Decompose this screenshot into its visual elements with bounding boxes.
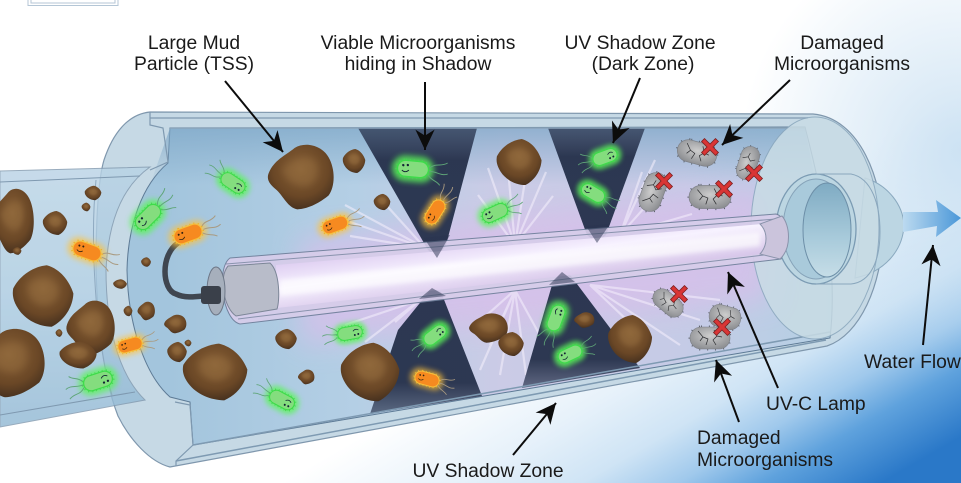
rock [137, 302, 155, 320]
label: UV Shadow Zone (Dark Zone): UV Shadow Zone [564, 33, 716, 54]
label: Water Flow [864, 245, 961, 373]
rock [498, 332, 524, 356]
rock [85, 186, 101, 200]
outlet ring [776, 174, 856, 284]
red cross [718, 184, 730, 194]
flange left [150, 112, 193, 466]
red cross [748, 168, 760, 178]
label: Damaged Microorganisms bottom [697, 360, 833, 471]
rock [469, 313, 508, 343]
arrow [923, 245, 933, 345]
bacterium [165, 212, 224, 252]
bacterium [573, 176, 622, 217]
label: Damaged Microorganisms bottom: Microorganisms [697, 450, 833, 471]
bacterium [320, 319, 368, 348]
label: UV-C Lamp [728, 272, 866, 415]
rock [298, 370, 314, 384]
damaged cell [675, 137, 719, 169]
end plate [751, 117, 879, 339]
rock [374, 194, 390, 210]
water flow arrow [903, 200, 961, 237]
damaged cell [690, 327, 730, 349]
bacterium [417, 181, 460, 233]
rock [13, 265, 73, 327]
bacterium [62, 362, 121, 403]
rock [82, 203, 90, 211]
rock [59, 342, 97, 368]
tube interior [127, 127, 832, 445]
rock [497, 139, 542, 185]
shadow wedge: bottom 1 [370, 288, 482, 414]
outer reactor tube [96, 112, 883, 467]
nozzle dome [855, 178, 904, 278]
bacterium [474, 190, 527, 231]
cropped frame fragment [28, 0, 118, 6]
quartz sleeve [222, 214, 787, 324]
red cross [704, 142, 716, 152]
green microorganisms [62, 141, 624, 418]
rock [268, 145, 334, 209]
rock [56, 329, 62, 337]
label: Viable Microorganisms: hiding in Shadow [345, 54, 491, 75]
label: Damaged Microorganisms bottom: Damaged [697, 428, 781, 449]
tube bottom rim [176, 332, 830, 461]
damaged cell [734, 144, 762, 182]
label: Damaged Microorganisms top: Microorganisms [774, 54, 910, 75]
lamp cable and connector [165, 243, 221, 304]
rock [341, 343, 399, 401]
damaged microorganisms [636, 137, 762, 349]
rock [141, 257, 151, 267]
tube top rim [150, 118, 808, 128]
label: Water Flow: Water Flow [864, 352, 961, 373]
purple glow around lamp [300, 185, 770, 345]
rock [0, 189, 34, 253]
arrow [613, 78, 640, 143]
rock [275, 329, 297, 349]
bacterium [550, 333, 600, 371]
label: UV Shadow Zone bottom: UV Shadow Zone [412, 461, 564, 482]
shadow zones [358, 128, 645, 414]
rock [113, 279, 127, 289]
red cross [674, 288, 684, 300]
shadow wedge: bottom 2 [522, 272, 640, 388]
orange microorganisms [64, 181, 460, 396]
rock [185, 340, 191, 346]
label: Large Mud Particle [134, 33, 283, 152]
rock [0, 329, 45, 397]
bacterium [202, 156, 254, 202]
bacterium [406, 316, 455, 360]
rock [13, 247, 21, 255]
lamp glow body [276, 224, 769, 308]
bacterium [535, 297, 572, 350]
label: Large Mud Particle: Large Mud [148, 33, 240, 54]
outlet end plate and nozzle [751, 117, 904, 339]
bacterium [408, 366, 457, 396]
rock [574, 312, 594, 328]
bacterium [111, 328, 161, 359]
rock [124, 306, 132, 316]
damaged cell [707, 302, 743, 332]
bacterium [64, 234, 123, 274]
lamp end cap right [760, 216, 788, 259]
arrow [513, 403, 556, 455]
light rays [345, 148, 720, 375]
label: UV Shadow Zone (Dark Zone): (Dark Zone) [592, 54, 694, 75]
damaged cell [636, 169, 670, 215]
arrow [722, 80, 790, 145]
rock [164, 315, 186, 333]
UV-C lamp [207, 214, 788, 324]
arrow [424, 82, 426, 150]
bacterium [575, 141, 624, 176]
arrow [728, 272, 778, 388]
bacterium [315, 205, 367, 241]
red cross [658, 176, 670, 186]
rock [343, 149, 365, 173]
label: Large Mud Particle: Particle (TSS) [134, 54, 254, 75]
arrow [716, 360, 739, 422]
rock [43, 211, 67, 235]
label: UV Shadow Zone (Dark Zone) [564, 33, 716, 143]
red cross [716, 322, 728, 332]
mud particles [0, 139, 652, 401]
label: UV Shadow Zone bottom [412, 403, 564, 482]
inlet pipe [0, 167, 150, 427]
label: Damaged Microorganisms top: Damaged [800, 33, 884, 54]
bacterium [251, 376, 303, 418]
rock [608, 315, 652, 363]
label: Viable Microorganisms: Viable Microorganisms [321, 33, 515, 54]
label: Viable Microorganisms [321, 33, 515, 150]
damaged cell [649, 285, 687, 321]
top shading [150, 128, 816, 185]
damaged cell [689, 185, 731, 209]
rock [167, 342, 187, 362]
rock [183, 344, 247, 400]
arrow [225, 81, 283, 152]
label: Damaged Microorganisms top [722, 33, 910, 145]
rock [66, 301, 115, 355]
label: UV-C Lamp: UV-C Lamp [766, 394, 866, 415]
shadow wedge: top 2 [548, 128, 645, 243]
translucent wedge tips over lamp [419, 224, 610, 299]
lamp end cap left [223, 263, 279, 316]
shadow wedge: top 1 [358, 128, 477, 258]
bacterium [125, 185, 181, 241]
bacterium [391, 154, 449, 186]
